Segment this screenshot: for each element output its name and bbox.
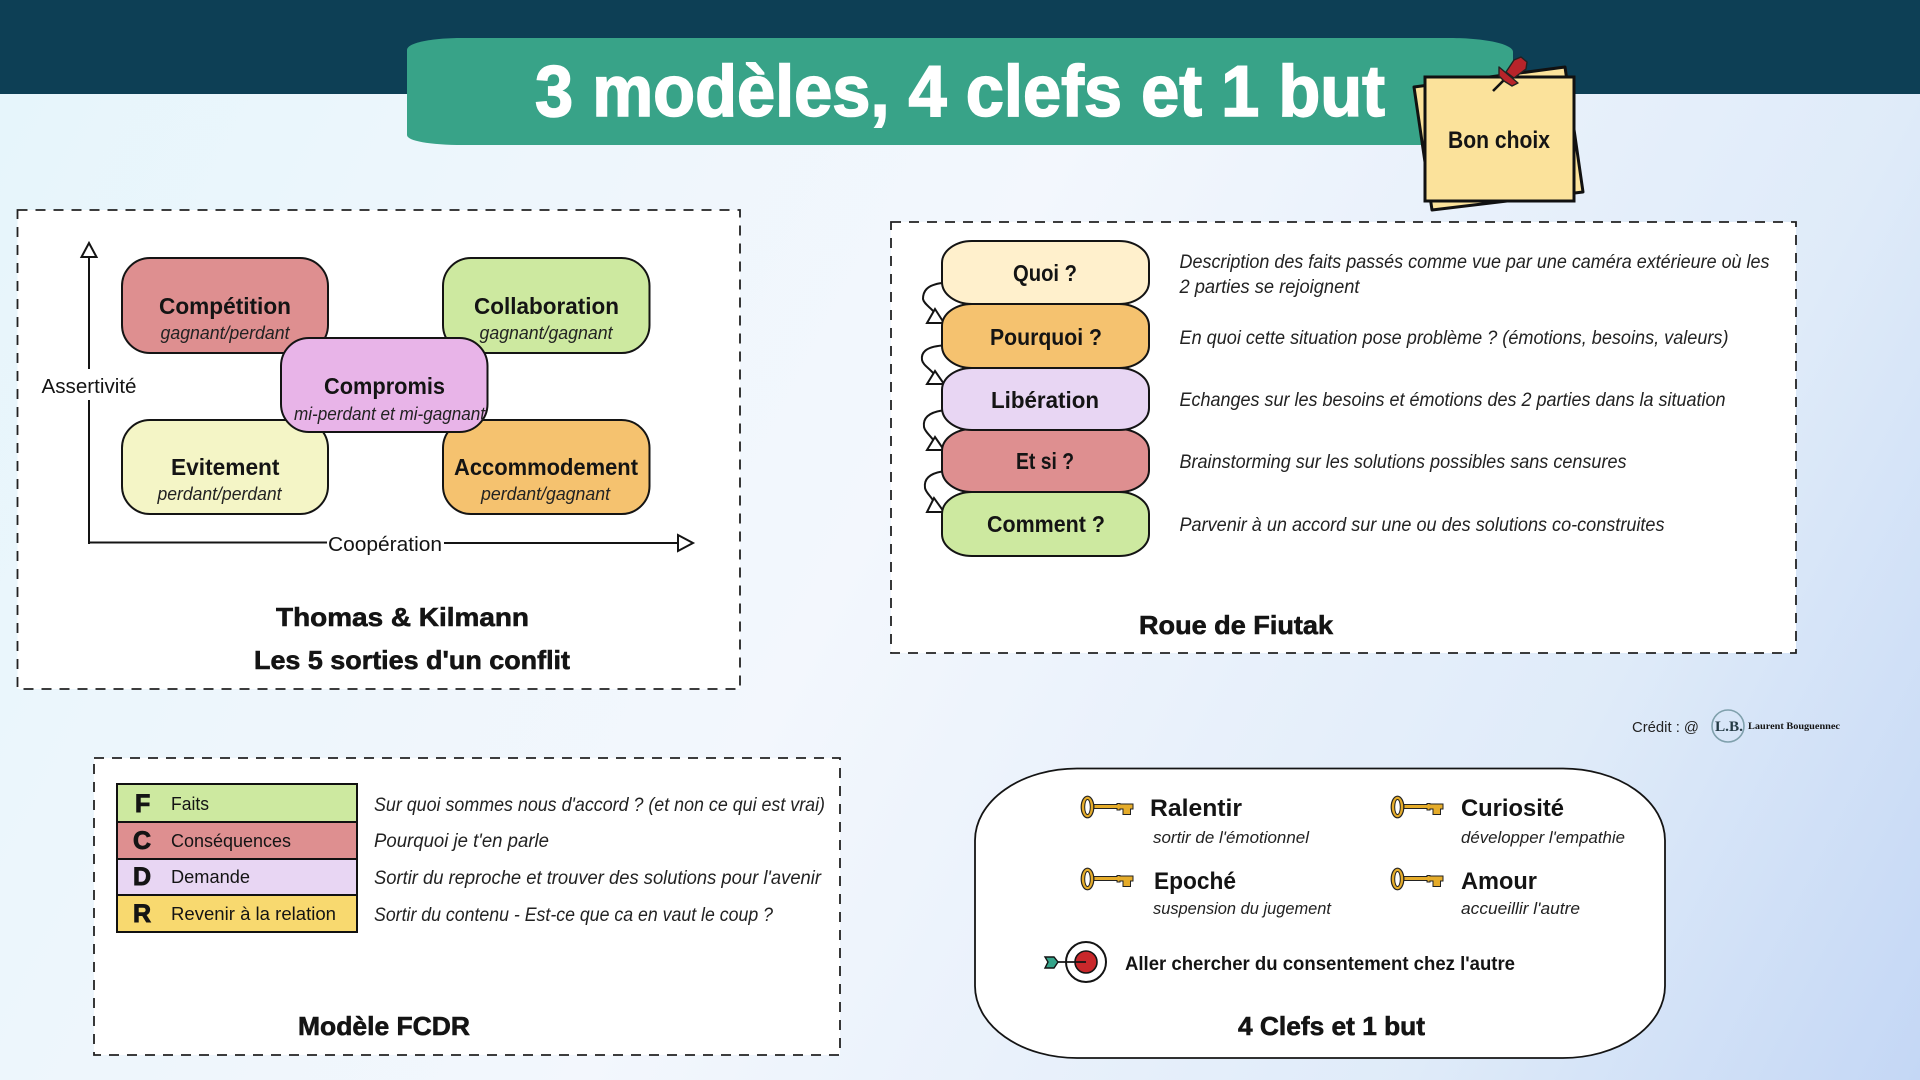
credit: Crédit : @: [1632, 719, 1699, 736]
box: accommodement: perdant/gagnant: [480, 484, 611, 504]
key: amour: Amour: [1461, 868, 1537, 895]
axis: coopération: [88, 534, 693, 556]
key: curiosité: développer l'empathie: [1461, 828, 1625, 847]
key: curiosité: Curiosité: [1461, 795, 1564, 822]
text: descriptions: [1179, 252, 1770, 536]
key: epoché: [1081, 868, 1332, 918]
row: C: [133, 827, 291, 855]
panel: Roue de Fiutak: [891, 222, 1796, 653]
key: epoché: suspension du jugement: [1153, 899, 1332, 918]
key: ralentir: Ralentir: [1150, 795, 1242, 822]
box: compromis: [281, 338, 488, 432]
text: FCDR descriptions: Sortir du reproche et trouver des solutions pour l'avenir: [374, 868, 822, 889]
header band: [0, 0, 1920, 94]
key: curiosité: [1391, 795, 1625, 847]
box: accommodement: Accommodement: [454, 454, 638, 480]
row: R: [133, 900, 336, 928]
step: comment: Comment ?: [987, 511, 1105, 537]
text: descriptions: Echanges sur les besoins et émotions des 2 parties dans la situation: [1180, 390, 1726, 411]
table: FCDR: [117, 784, 357, 932]
row: D: [133, 863, 250, 891]
axis: assertivité: Assertivité: [42, 376, 136, 398]
text: FCDR descriptions: [374, 795, 825, 926]
box: compromis: Compromis: [324, 373, 445, 399]
key: ralentir: [1081, 795, 1310, 847]
step: et si: Et si ?: [1016, 448, 1074, 474]
step: quoi: Quoi ?: [1013, 260, 1077, 286]
title banner: [407, 38, 1513, 145]
text: descriptions: Brainstorming sur les solutions possibles sans censures: [1180, 452, 1627, 473]
panel heading: Thomas & Kilmann: [254, 602, 570, 675]
row: C: Conséquences: [171, 831, 291, 851]
row: C: C: [133, 827, 151, 855]
text: descriptions: 2 parties se rejoignent: [1179, 277, 1360, 298]
panel heading: Thomas & Kilmann: Les 5 sorties d'un conflit: [254, 645, 570, 675]
box: collaboration: [443, 258, 650, 353]
box: évitement: Evitement: [171, 454, 280, 480]
box: collaboration: gagnant/gagnant: [480, 323, 613, 343]
icon: push pin: [1493, 57, 1527, 91]
panel: Thomas & Kilmann: [18, 210, 740, 689]
panel heading: Modèle FCDR: Modèle FCDR: [298, 1011, 470, 1041]
text: descriptions: Description des faits passés comme vue par une caméra extérieure où les: [1180, 252, 1770, 273]
text: descriptions: Parvenir à un accord sur une ou des solutions co-construites: [1180, 515, 1665, 536]
step: libération: [942, 368, 1149, 430]
panel heading: Roue de Fiutak: Roue de Fiutak: [1139, 610, 1334, 640]
box: compétition: [122, 258, 328, 353]
text: FCDR descriptions: Sortir du contenu - Est-ce que ca en vaut le coup ?: [374, 905, 773, 926]
box: accommodement: [443, 420, 650, 514]
box: compétition: Compétition: [159, 293, 291, 319]
box: compromis: mi-perdant et mi-gagnant: [294, 404, 486, 424]
panel heading: 4 Clefs et 1 but: 4 Clefs et 1 but: [1238, 1011, 1425, 1041]
icon: target and arrow: [1045, 942, 1106, 982]
step: libération: Libération: [991, 387, 1099, 413]
text: FCDR descriptions: Sur quoi sommes nous d'accord ? (et non ce qui est vrai): [374, 795, 825, 816]
key: ralentir: sortir de l'émotionnel: [1153, 828, 1310, 847]
box: collaboration: Collaboration: [474, 293, 619, 319]
key: amour: [1391, 868, 1580, 918]
box: compétition: gagnant/perdant: [160, 323, 290, 343]
row: R: Revenir à la relation: [171, 904, 336, 924]
row: D: D: [133, 863, 151, 891]
row: F: Faits: [171, 794, 209, 814]
cycle arrows: [922, 283, 944, 512]
step: pourquoi: Pourquoi ?: [990, 324, 1102, 350]
axis: coopération: Coopération: [328, 534, 442, 556]
row: F: F: [135, 790, 150, 818]
logo: L.B.: L.B.: [1715, 719, 1743, 735]
row: R: R: [133, 900, 151, 928]
logo: L.B.: [1712, 710, 1840, 742]
panel heading: Thomas & Kilmann: Thomas & Kilmann: [276, 602, 529, 632]
credit: [1632, 710, 1840, 742]
title: 3 modèles, 4 clefs et 1 but: [535, 52, 1385, 132]
text: FCDR descriptions: Pourquoi je t'en parle: [374, 831, 549, 852]
box: évitement: [122, 420, 328, 514]
step: et si: [942, 429, 1149, 492]
sticky note: bon choix: Bon choix: [1448, 127, 1551, 154]
sticky note: bon choix: [1414, 57, 1583, 210]
step: comment: [942, 492, 1149, 556]
logo: L.B.: Laurent Bouguennec: [1748, 722, 1840, 732]
key: epoché: Epoché: [1154, 868, 1236, 895]
text: descriptions: En quoi cette situation pose problème ? (émotions, besoins, valeurs): [1180, 328, 1728, 349]
row: D: Demande: [171, 867, 250, 887]
panel: 4 clefs et 1 but: [975, 768, 1665, 1058]
key: amour: accueillir l'autre: [1461, 899, 1580, 918]
axis: assertivité: [42, 243, 136, 544]
box: évitement: perdant/perdant: [157, 484, 282, 504]
row: F: [135, 790, 209, 818]
panel: Modèle FCDR: [94, 758, 840, 1055]
text: but: Aller chercher du consentement chez l'autre: [1125, 954, 1515, 975]
step: pourquoi: [942, 304, 1149, 368]
step: quoi: [942, 241, 1149, 304]
